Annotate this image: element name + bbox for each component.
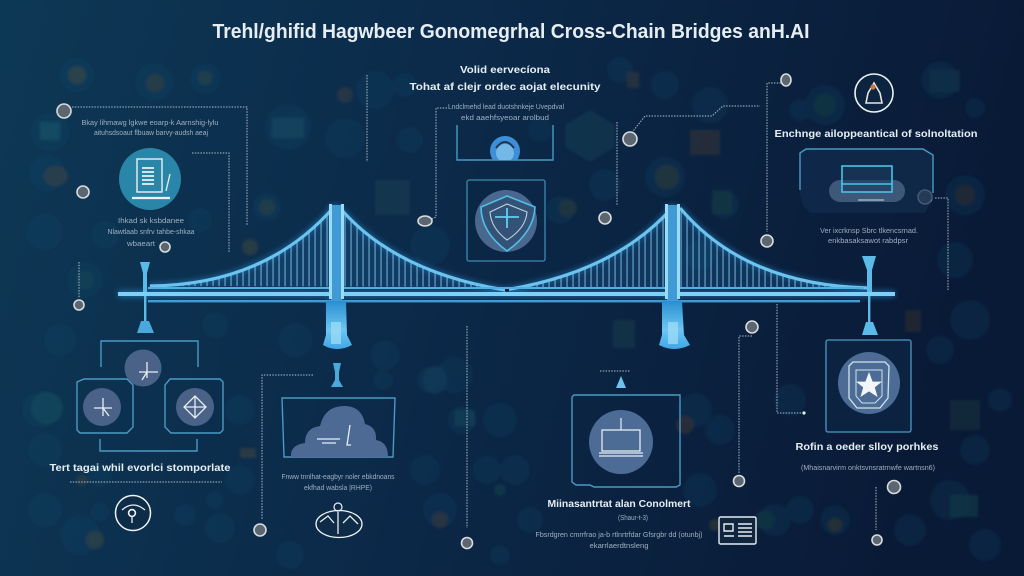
text: monitor caption: Fbsrdgren cmrrfrao ja-b rtlnrtrfdar Gfsrgbr dd (otunbj) — [536, 532, 702, 539]
left anchor — [137, 262, 154, 333]
heading: security: Volid eervecíona — [460, 64, 550, 76]
icon: document — [119, 148, 181, 210]
left tower and pier — [323, 204, 352, 387]
text: top left intro — [82, 120, 219, 137]
right anchor — [862, 256, 878, 335]
panel: bottom left network — [50, 341, 231, 530]
panel: bottom centre — [536, 371, 756, 550]
panel: cloud — [282, 398, 395, 538]
title: Trehl/ghifid Hagwbeer Gonomegrhal Cross-Chain Bridges anH.AI — [212, 21, 810, 43]
text: top left caption: wbaeart — [126, 241, 155, 248]
card group: three nodes — [77, 341, 223, 451]
bridge — [118, 204, 895, 387]
text: top left intro: aituhsdsoaut flbuaw barvy-audsh aeaj — [94, 130, 208, 137]
heading: star: Rofin a oeder slloy porhkes — [796, 441, 939, 453]
card: shield plus — [467, 180, 545, 261]
text: star caption: (Mhaisnarvirm onktsvnsratrnwfe wartnsn6) — [801, 465, 935, 472]
text: cloud caption — [282, 474, 395, 492]
deck — [118, 287, 895, 302]
text: exchange caption: enkbasaksawot rabdpsr — [828, 238, 909, 245]
card: star shield — [826, 340, 911, 432]
text: top left caption: Nlawtlaab snfrv tahbe-shkaa — [108, 229, 195, 236]
bracket with blue badge — [456, 125, 554, 161]
text: security caption — [448, 104, 564, 122]
card: cloud — [282, 398, 395, 457]
icon: signal — [116, 496, 150, 530]
text: top left caption — [108, 218, 195, 248]
text: cloud caption: ekfhad wabsla |RHPE) — [304, 485, 372, 492]
bridge glow — [118, 205, 895, 345]
icon: id card — [719, 517, 756, 544]
heading: monitor: Miinasantrtat alan Conolmert — [548, 498, 691, 510]
main cables — [150, 208, 868, 290]
text: top left intro: Bkay lihmawg lgkwe eoarp-k Aarnshig-lylu — [82, 120, 219, 127]
text: monitor caption: (Shaur-t-3) — [618, 515, 648, 522]
text: top left caption: Ihkad sk ksbdanee — [118, 218, 184, 225]
panel: top right exchange — [774, 74, 978, 245]
card: laptop — [800, 149, 933, 213]
text: monitor caption: ekarrlaerdtnsleng — [590, 543, 649, 550]
text: exchange caption — [820, 228, 918, 245]
connector nodes — [57, 74, 932, 548]
panel: top left document — [82, 120, 219, 248]
text: cloud caption: Fnww tnnlhat-eagbyr noler ebkdnoans — [282, 474, 395, 481]
card: monitor — [572, 395, 680, 487]
panel: right star — [796, 340, 939, 472]
text: security caption: ekd aaehfsyeoar arolbud — [461, 115, 549, 122]
arrow: small pointer — [600, 371, 630, 388]
icon: network globe — [316, 503, 362, 538]
span backdrop — [150, 208, 868, 290]
right tower and pier — [659, 204, 690, 349]
decorative connectors — [70, 75, 948, 530]
text: monitor caption — [536, 515, 702, 550]
panel: top centre security — [410, 64, 601, 261]
suspender cables — [177, 211, 832, 287]
icon: badge — [855, 74, 893, 112]
heading: security — [410, 64, 601, 93]
heading: exchange: Enchnge ailoppeantical of solnoltation — [774, 128, 978, 140]
heading: network: Tert tagai whil evorlci stomporlate — [50, 462, 231, 474]
text: security caption: Lndclmehd lead duotshnkeje Uvepdval — [448, 104, 564, 111]
text: exchange caption: Ver ixcrknsp Sbrc tlkencsrnad. — [820, 228, 918, 235]
heading: security: Tohat af clejr ordec aojat elecunity — [410, 81, 601, 93]
